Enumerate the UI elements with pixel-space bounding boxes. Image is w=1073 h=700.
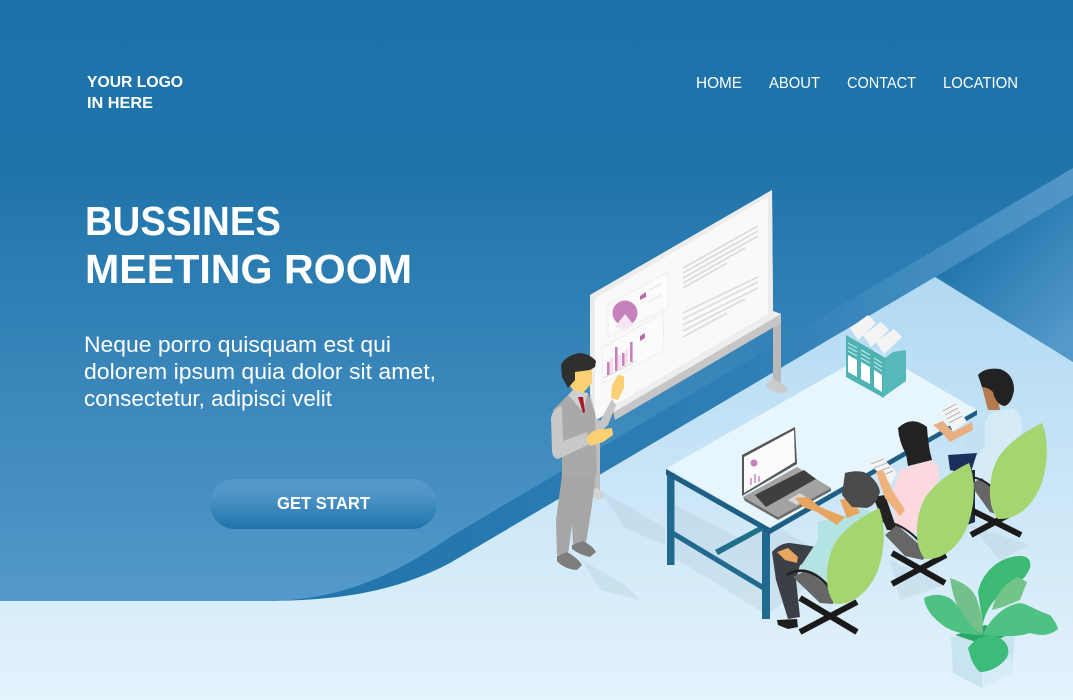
- board legs: [591, 318, 787, 500]
- board panel: [590, 190, 773, 424]
- logo: YOUR LOGO: [87, 74, 183, 91]
- navigation menu: [696, 75, 1018, 92]
- face: [568, 368, 592, 393]
- knee hand: [777, 548, 798, 563]
- chart: bar panel: [602, 313, 664, 383]
- button: get start: [210, 479, 437, 529]
- touchpad: [788, 493, 808, 505]
- right leaf: [983, 603, 1058, 636]
- floor shadows: [582, 385, 1030, 612]
- inner leaf: [992, 577, 1027, 610]
- chair base: [892, 553, 946, 584]
- title: [85, 198, 412, 292]
- floor: [0, 277, 1073, 700]
- chair seat: [793, 570, 836, 604]
- whiteboard: [590, 190, 787, 500]
- dark leaves: [955, 625, 1010, 645]
- curved wall band: [270, 168, 1073, 601]
- title: MEETING ROOM: [85, 246, 412, 292]
- shirt: [800, 508, 873, 600]
- table top: [667, 350, 977, 528]
- person 3 with chair: [933, 369, 1047, 535]
- navigation menu: LOCATION: [943, 75, 1018, 92]
- arm: [876, 470, 905, 516]
- raised hand: [611, 375, 624, 400]
- board text lines: [683, 226, 758, 337]
- description text: [84, 332, 436, 411]
- chart: pie panel: [608, 272, 668, 337]
- hair: [561, 353, 596, 388]
- left upper leaf: [950, 578, 983, 634]
- chair base: [800, 598, 857, 632]
- forearm and hand: [795, 497, 845, 525]
- legs: [556, 471, 596, 555]
- table legs and stretchers: [667, 473, 770, 619]
- file folders: [846, 315, 906, 398]
- pot: [951, 637, 1015, 688]
- presenter man: [551, 353, 624, 570]
- laptop: [742, 427, 831, 520]
- navigation menu: HOME: [696, 75, 742, 92]
- hair: [898, 421, 932, 466]
- chair base: [971, 508, 1021, 535]
- navigation menu: CONTACT: [847, 75, 916, 92]
- logo: [87, 74, 183, 112]
- trousers: [772, 543, 817, 619]
- table edge: [666, 410, 977, 534]
- description text: Neque porro quisquam est qui: [84, 332, 391, 357]
- laptop screen: [742, 427, 797, 496]
- laptop base: [743, 467, 831, 517]
- dark backrest: [873, 495, 897, 530]
- shoes: [572, 541, 596, 557]
- right wall segment: [937, 195, 1073, 365]
- top leaf: [978, 556, 1030, 625]
- keyboard: [755, 470, 816, 507]
- body: [970, 408, 1022, 500]
- navigation menu: ABOUT: [769, 75, 820, 92]
- chair seat: [970, 478, 1010, 517]
- button: get start: GET START: [277, 493, 370, 513]
- tie: [578, 397, 585, 413]
- chair back: [990, 423, 1047, 519]
- collar: [568, 390, 588, 412]
- arm and hand: [933, 421, 973, 442]
- left leaf: [924, 595, 983, 635]
- plant: [924, 556, 1058, 688]
- title: BUSSINES: [85, 198, 281, 244]
- chair back: [827, 508, 884, 604]
- front leaf: [968, 636, 1008, 672]
- hair: [842, 471, 880, 508]
- description text: dolorem ipsum quia dolor sit amet,: [84, 359, 436, 384]
- raised arm: [590, 392, 616, 436]
- body: [893, 460, 939, 535]
- person 2 with chair: [868, 421, 974, 584]
- trousers: [948, 453, 977, 475]
- chair back: [917, 463, 974, 559]
- logo: IN HERE: [87, 95, 153, 112]
- person 1 with chair: [772, 471, 884, 632]
- shoe: [777, 619, 798, 629]
- description text: consectetur, adipisci velit: [84, 386, 332, 411]
- near arm: [551, 406, 590, 459]
- board tray: [612, 311, 781, 420]
- chair seat: [885, 525, 928, 560]
- near hand: [586, 428, 613, 446]
- table: [666, 350, 977, 619]
- neck and hair: [982, 385, 1000, 410]
- neck: [840, 497, 860, 518]
- paper: [940, 402, 967, 431]
- paper: [868, 457, 897, 484]
- jacket: [553, 393, 597, 479]
